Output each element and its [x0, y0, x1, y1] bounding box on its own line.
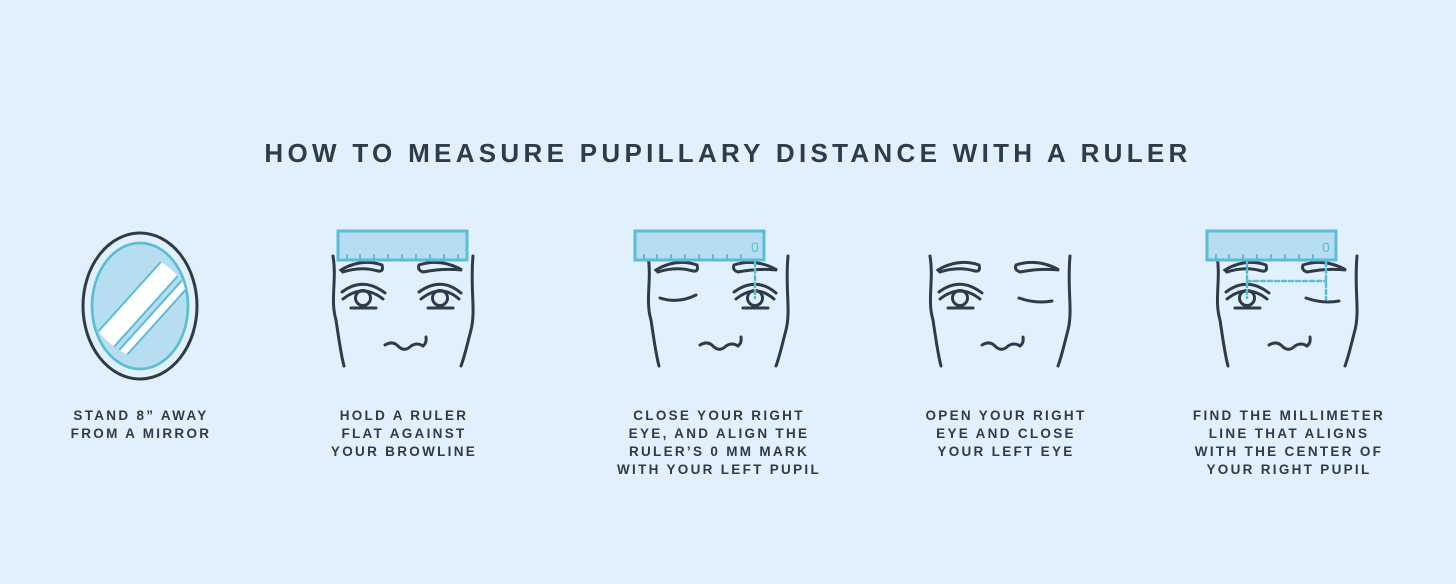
caption: step 4: YOUR LEFT EYE: [937, 444, 1075, 459]
caption: step 5: FIND THE MILLIMETER: [1193, 408, 1385, 423]
caption: step 3: WITH YOUR LEFT PUPIL: [617, 462, 821, 477]
caption: step 2: [331, 408, 477, 459]
caption: step 3: EYE, AND ALIGN THE: [629, 426, 809, 441]
icon: mirror: [82, 232, 198, 380]
caption: step 4: OPEN YOUR RIGHT: [925, 408, 1087, 423]
caption: step 1: [71, 408, 211, 441]
title: HOW TO MEASURE PUPILLARY DISTANCE WITH A RULER: [264, 138, 1192, 168]
icon: face, right eye closed, ruler aligned: 0: [751, 239, 759, 255]
caption: step 4: [925, 408, 1087, 459]
icon: face, left eye closed: [930, 256, 1070, 366]
caption: step 4: EYE AND CLOSE: [936, 426, 1076, 441]
icon: face, measuring right pupil: 0: [1322, 239, 1330, 255]
caption: step 3: RULER’S 0 MM MARK: [629, 444, 809, 459]
caption: step 2: HOLD A RULER: [340, 408, 468, 423]
caption: step 5: [1193, 408, 1385, 477]
icon: face, right eye closed, ruler aligned: [635, 231, 788, 366]
caption: step 5: WITH THE CENTER OF: [1195, 444, 1383, 459]
caption: step 5: LINE THAT ALIGNS: [1209, 426, 1369, 441]
caption: step 1: FROM A MIRROR: [71, 426, 211, 441]
caption: step 2: YOUR BROWLINE: [331, 444, 477, 459]
caption: step 2: FLAT AGAINST: [341, 426, 467, 441]
icon: face, measuring right pupil: [1207, 231, 1357, 366]
caption: step 5: YOUR RIGHT PUPIL: [1206, 462, 1372, 477]
caption: step 1: STAND 8” AWAY: [73, 408, 209, 423]
icon: face with ruler (step 2): [333, 231, 473, 366]
caption: step 3: [617, 408, 821, 477]
caption: step 3: CLOSE YOUR RIGHT: [633, 408, 805, 423]
